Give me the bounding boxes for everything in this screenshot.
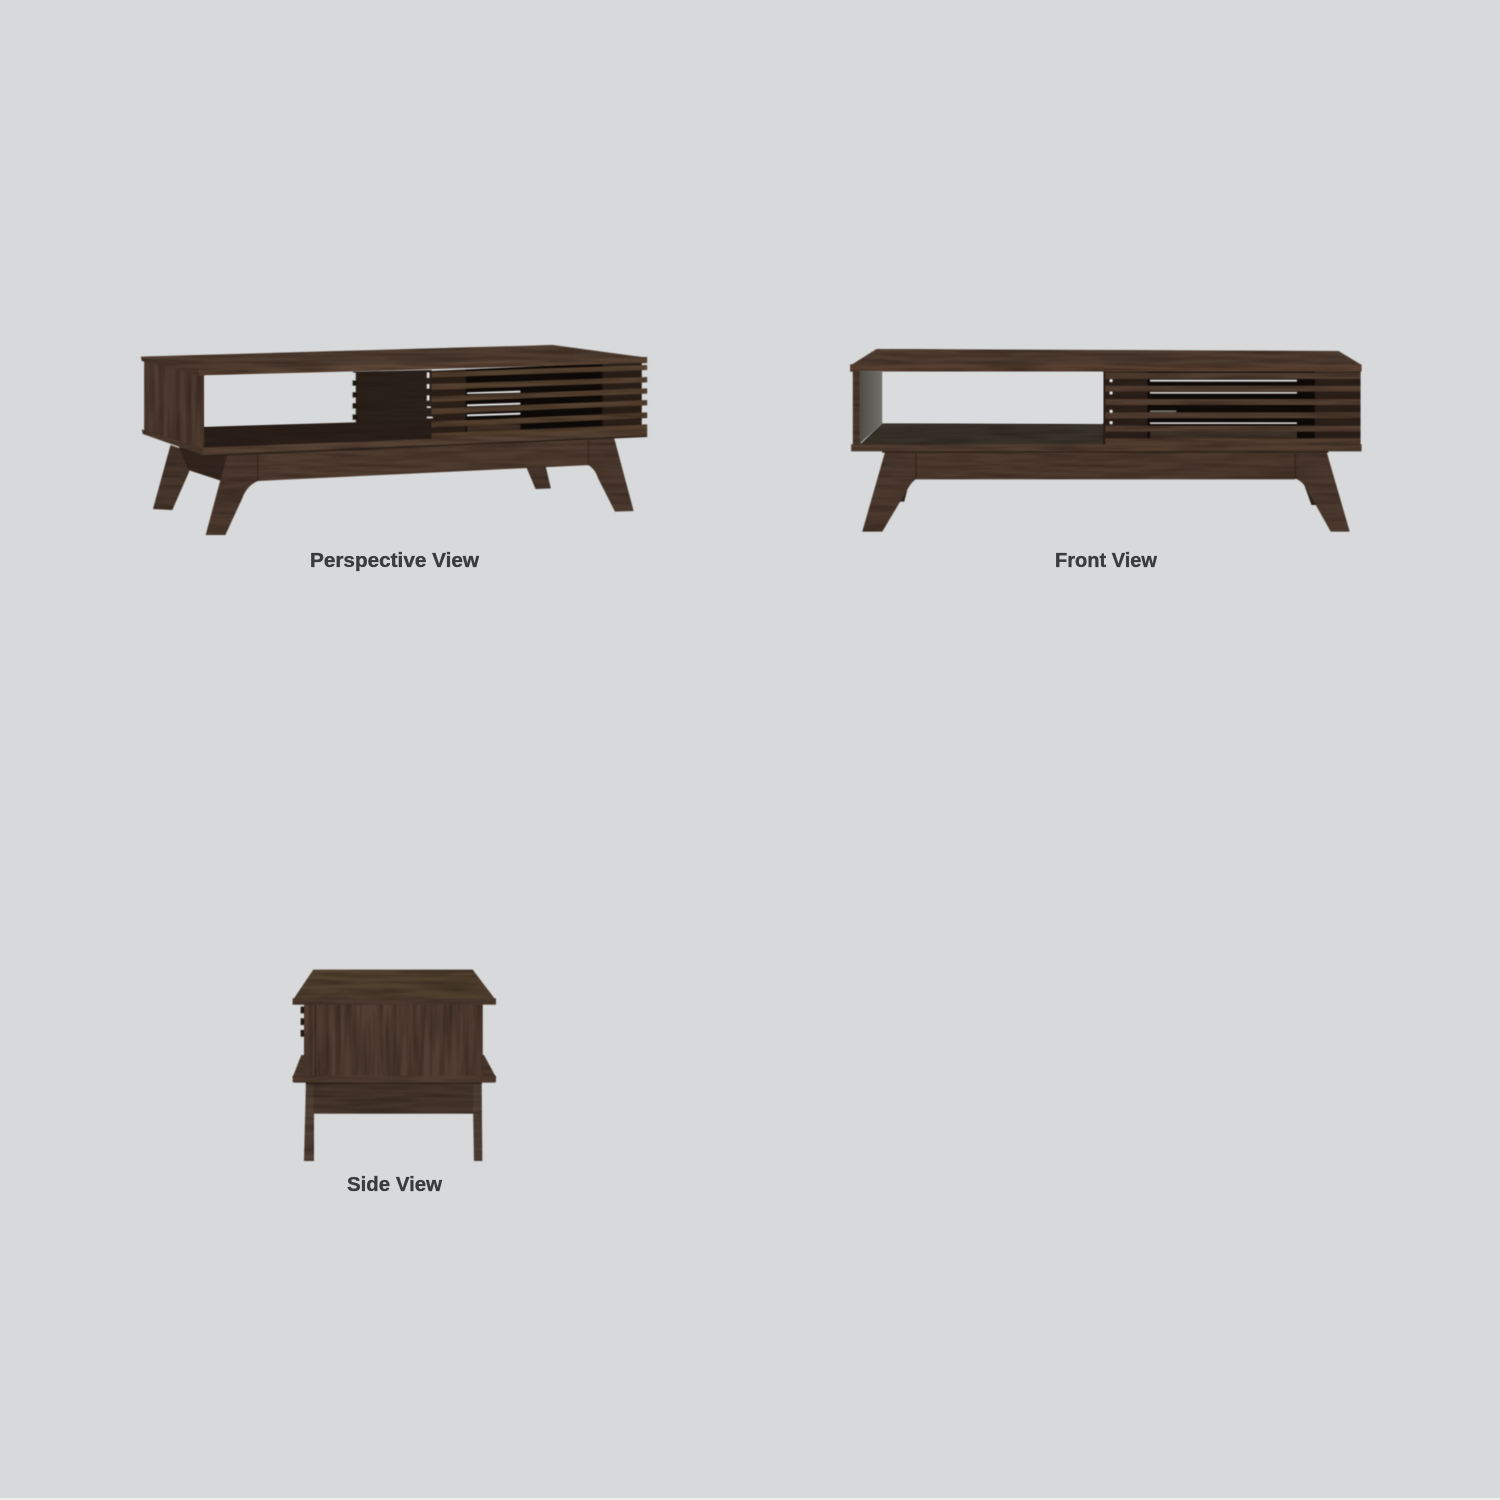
label: Front View: Front View <box>1055 550 1157 572</box>
leg seams <box>916 453 1295 479</box>
top surface <box>293 970 496 1000</box>
shelf edge and top <box>293 970 496 1084</box>
slat end dots <box>1109 379 1113 424</box>
floor visible behind slats <box>1150 432 1297 438</box>
body, slats and top <box>141 345 647 457</box>
bottom shelf edge <box>203 430 647 455</box>
slat backing <box>429 362 642 442</box>
apron <box>916 450 1295 479</box>
silver rails <box>1150 380 1297 424</box>
panel: front view <box>850 349 1362 572</box>
shelf floor <box>204 421 431 452</box>
top surface <box>850 349 1362 366</box>
label: Perspective View: Perspective View <box>310 550 479 572</box>
inner grey side <box>860 371 883 444</box>
top surface <box>141 345 647 370</box>
illustration: coffee table from side <box>293 970 496 1161</box>
bottom shelf edge <box>851 444 1362 451</box>
floor visible behind slats <box>467 424 520 432</box>
bottom edge highlight <box>0 1498 1500 1500</box>
slat ends <box>301 1007 305 1037</box>
illustration: coffee table in perspective <box>141 345 647 535</box>
legs and aprons <box>153 435 634 535</box>
label: Side View: Side View <box>347 1174 442 1196</box>
shelf floor <box>860 423 1107 446</box>
legs <box>304 1081 482 1161</box>
top edge <box>293 998 496 1005</box>
panel joint <box>315 1005 316 1076</box>
back legs <box>898 482 1317 505</box>
left side panel <box>853 370 861 445</box>
shelf top <box>293 1055 496 1077</box>
shelf underside shadow <box>882 451 1328 453</box>
slats <box>1105 373 1361 445</box>
leg seams <box>258 440 588 481</box>
slat backing <box>1103 370 1361 446</box>
apron <box>313 1081 473 1114</box>
legs, apron and shelf base <box>293 1007 496 1161</box>
white gaps by slats <box>427 372 433 418</box>
panel: perspective view <box>141 345 647 572</box>
open compartment and bright details <box>860 371 1297 444</box>
table body and legs <box>850 349 1362 532</box>
inner back panel <box>353 370 431 442</box>
top front edge <box>199 357 647 376</box>
see-through opening <box>204 373 356 427</box>
front apron <box>257 435 590 481</box>
bottom left edge <box>142 429 203 455</box>
top left edge <box>141 357 199 376</box>
panel: side view <box>293 970 496 1196</box>
body side panel <box>304 1003 483 1077</box>
see-through opening <box>882 372 1103 423</box>
open compartment and bright details <box>204 372 520 427</box>
side apron <box>177 442 231 482</box>
shelf edge <box>293 1076 496 1083</box>
front legs <box>862 450 1350 532</box>
shelf underside shadow <box>306 1082 482 1084</box>
slats <box>431 365 647 439</box>
back legs <box>153 445 551 510</box>
small notches <box>352 380 358 420</box>
shelf underside shadow <box>203 435 647 457</box>
front legs <box>206 435 634 535</box>
silver rails <box>467 391 520 416</box>
top front edge <box>850 364 1362 372</box>
illustration: coffee table from front <box>850 349 1362 532</box>
left side panel <box>144 359 204 452</box>
